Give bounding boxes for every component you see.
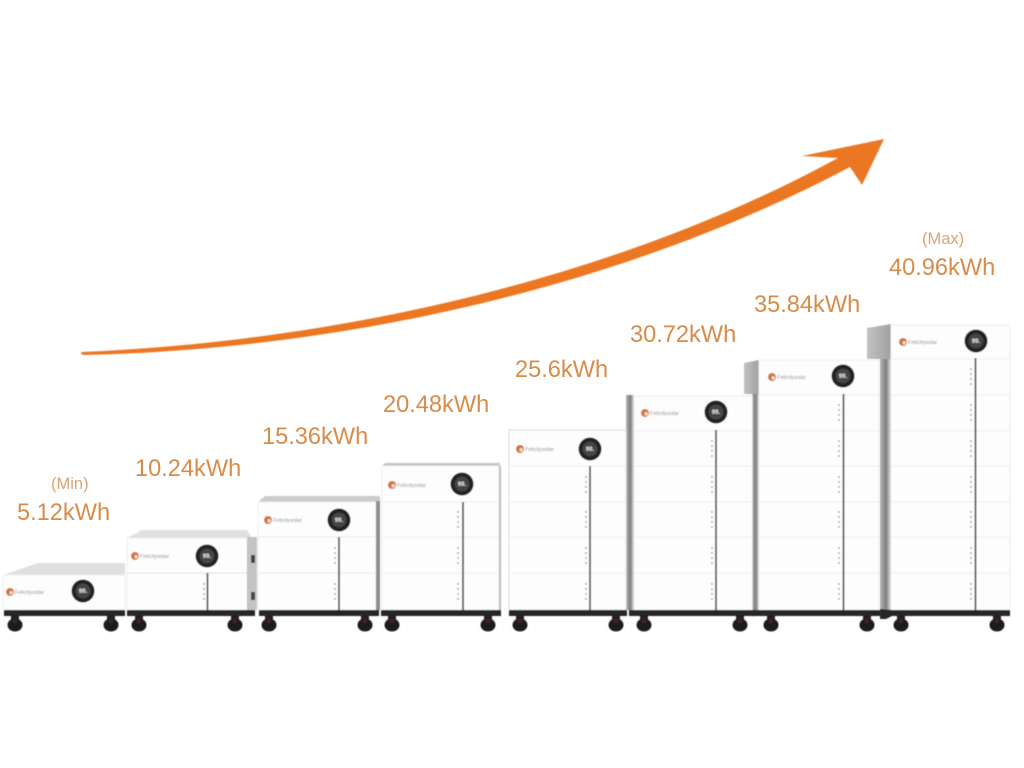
capacity label: 30.72kWh: 30.72kWh [630, 322, 736, 348]
battery stack 3: 15.36kWh [258, 496, 380, 632]
capacity label: 5.12kWh (Min) [17, 475, 110, 526]
battery stack 2: 10.24kWh: Felicitysolar [140, 554, 169, 560]
capacity label: 40.96kWh (Max): (Max) [922, 230, 964, 248]
battery stack 3: 15.36kWh: Felicitysolar [273, 518, 302, 524]
battery stack 5: 25.6kWh: Felicitysolar [525, 447, 554, 453]
battery stack 6: 30.72kWh: Felicitysolar [650, 411, 679, 417]
battery stack 1: 5.12kWh [3, 563, 125, 632]
growth arrow [81, 139, 884, 355]
capacity label: 25.6kWh: 25.6kWh [515, 357, 608, 383]
capacity label: 5.12kWh (Min): 5.12kWh [17, 500, 110, 526]
capacity label: 40.96kWh (Max) [889, 230, 995, 281]
battery stack 7: 35.84kWh: Felicitysolar [777, 375, 806, 381]
capacity label: 5.12kWh (Min): (Min) [51, 475, 89, 493]
battery stack 1: 5.12kWh: Felicitysolar [15, 590, 44, 596]
battery stack 5: 25.6kWh [509, 430, 627, 632]
battery stack 2: 10.24kWh [127, 530, 257, 632]
battery stack 4: 20.48kWh [381, 463, 501, 632]
capacity label: 15.36kWh: 15.36kWh [262, 424, 368, 450]
battery stack 7: 35.84kWh [744, 360, 881, 632]
capacity label: 10.24kWh: 10.24kWh [135, 456, 241, 482]
battery stack 4: 20.48kWh: Felicitysolar [397, 483, 426, 489]
capacity label: 40.96kWh (Max): 40.96kWh [889, 255, 995, 281]
capacity label: 20.48kWh: 20.48kWh [383, 392, 489, 418]
capacity label: 35.84kWh: 35.84kWh [754, 292, 860, 318]
battery stack 8: 40.96kWh [867, 324, 1010, 632]
battery stack 8: 40.96kWh: Felicitysolar [908, 340, 937, 346]
battery stack 6: 30.72kWh [626, 395, 754, 632]
